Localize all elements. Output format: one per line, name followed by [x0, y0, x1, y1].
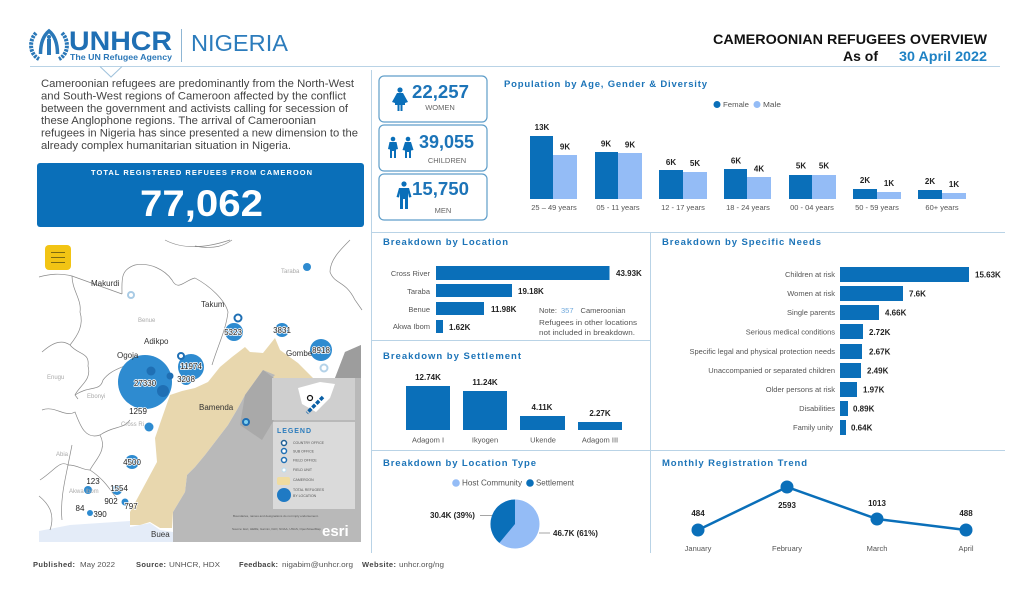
note: Refugees in other locations [539, 318, 637, 327]
bar chart: 25 – 49 years [531, 203, 577, 212]
bar chart: Family unity [793, 423, 833, 432]
bar chart: 1.97K [863, 386, 885, 394]
line chart: February [772, 544, 802, 553]
panel: children count [379, 125, 487, 171]
panel: men count: 15,750 [412, 179, 469, 199]
map: grey neighbouring region [173, 345, 361, 542]
country name: NIGERIA [191, 30, 289, 56]
bar chart: 2K [925, 177, 935, 186]
panel: total registered refugees [37, 163, 364, 227]
map: bubble values: 8918 [312, 346, 330, 355]
intro text block: already complex humanitarian situation in Nigeria. [41, 140, 291, 152]
bar chart: Adagom III [582, 436, 618, 444]
map: refugee bubbles [84, 263, 332, 516]
panel: population by age and gender [504, 79, 966, 212]
map legend: FIELD UNIT [293, 468, 313, 472]
heading: Breakdown by Settlement [383, 351, 522, 362]
bar chart: 1.62K [449, 323, 471, 332]
bar chart: Akwa Ibom [393, 322, 430, 331]
bar chart: 2K [860, 176, 870, 185]
bar chart: 2.67K [869, 348, 891, 356]
map: bubble values: 123 [86, 477, 100, 486]
footer: Published: [33, 560, 75, 569]
heading: Population by Age, Gender & Diversity [504, 79, 708, 90]
heading: Breakdown by Location Type [383, 458, 536, 469]
line chart: March [867, 544, 887, 553]
map: place labels: Cross Ri [121, 422, 144, 428]
bar chart: 5K [796, 162, 806, 170]
heading: Breakdown by Location [383, 237, 508, 248]
map: bubble values: 4500 [123, 458, 141, 467]
bar chart: Ukende [530, 436, 556, 444]
bar chart: Benue [408, 305, 430, 314]
pie chart: 30.4K (39%) [430, 511, 475, 520]
title: 30 April 2022 [899, 48, 987, 64]
panel: men count [379, 174, 487, 220]
bar chart: Single parents [787, 308, 835, 317]
line chart: 484 [691, 509, 705, 518]
bar chart: 50 - 59 years [855, 203, 899, 212]
intro text block: these Anglophone regions. The arrival of Cameroonian [41, 115, 316, 127]
panel: women count: 22,257 [412, 82, 469, 102]
panel: men count: MEN [435, 206, 451, 215]
bar chart [406, 373, 622, 444]
bar chart: 60+ years [925, 203, 959, 212]
map legend: FIELD OFFICE [293, 458, 317, 462]
bar chart: 13K [535, 123, 550, 132]
map: place labels: Enugu [47, 375, 64, 381]
intro text block [41, 78, 358, 152]
panel: women count: WOMEN [425, 103, 455, 112]
panel: children count: 39,055 [419, 132, 474, 152]
footer: Website: [362, 560, 396, 569]
map legend: SUB OFFICE [293, 450, 315, 454]
map: Cameroon tan region [130, 338, 313, 528]
icon: UNHCR emblem [31, 31, 67, 59]
footer [33, 560, 444, 569]
map: place labels: Ebonyi [87, 394, 105, 400]
map legend: LEGEND [277, 428, 311, 435]
map credits: Source: Esri, HERE, Garmin, FAO, NOAA, USGS, OpenStreetMap [232, 527, 321, 531]
line chart [685, 480, 974, 553]
legend: Settlement [536, 478, 575, 488]
total label: TOTAL REGISTERED REFUEES FROM CAMEROON [91, 168, 312, 177]
line chart: 1013 [868, 499, 886, 508]
heading: Breakdown by Specific Needs [662, 237, 821, 248]
panel: monthly registration trend [662, 458, 974, 553]
logo tagline: The UN Refugee Agency [70, 52, 172, 62]
line chart: April [958, 544, 974, 553]
panel: breakdown by location [383, 237, 642, 337]
map: bubble values: 84 [76, 504, 85, 513]
map credits: esri [322, 523, 349, 540]
bar chart: 43.93K [616, 269, 642, 278]
bar chart: Children at risk [785, 270, 835, 279]
map: bubble values: 902 [104, 497, 118, 506]
bar chart: 18 - 24 years [726, 203, 770, 212]
bar chart: 19.18K [518, 287, 544, 296]
bar chart: 0.89K [853, 404, 875, 414]
pie chart [430, 500, 598, 548]
panel: breakdown by settlement [383, 351, 622, 444]
bar chart: Cross River [391, 269, 431, 278]
bar chart: Adagom I [412, 436, 444, 444]
bar chart: 1K [884, 179, 894, 188]
bar chart: 12.74K [415, 373, 441, 382]
line chart: 2593 [778, 501, 796, 510]
map: bubble values: 1259 [129, 407, 147, 416]
line chart: 488 [959, 509, 973, 518]
bar chart: 2.49K [867, 366, 889, 376]
panel: children count: CHILDREN [428, 156, 466, 165]
bar chart: Taraba [407, 287, 431, 296]
button: yellow map menu [45, 245, 71, 270]
bar chart: 9K [625, 140, 635, 150]
bar chart: 2.27K [589, 409, 611, 418]
legend: Male [763, 100, 781, 109]
bar chart: 05 - 11 years [596, 203, 640, 212]
bar chart [689, 267, 1001, 435]
bar chart: 00 - 04 years [790, 203, 834, 212]
map: place labels: Ogoja [117, 351, 139, 360]
panel: women count [379, 76, 487, 122]
map: place labels: Benue [138, 318, 156, 324]
bar chart: 9K [560, 142, 570, 152]
panel: map [39, 239, 362, 542]
title: As of [843, 48, 878, 64]
map: place labels: Bamenda [199, 403, 234, 412]
heading: Monthly Registration Trend [662, 458, 807, 469]
map: place labels: Buea [151, 530, 170, 539]
bar chart: Ikyogen [472, 436, 498, 444]
icon: woman [392, 87, 408, 111]
footer: UNHCR, HDX [169, 560, 220, 569]
note: Note: 357 Cameroonian [539, 306, 626, 315]
map: place labels [47, 269, 313, 539]
footer: unhcr.org/ng [399, 560, 444, 569]
map: place labels: Gombe [286, 349, 313, 358]
bar chart: 4K [754, 164, 764, 174]
map legend: BY LOCATION [293, 494, 317, 498]
map: bubble values: 5323 [224, 328, 242, 337]
footer: Feedback: [239, 560, 278, 569]
title [713, 32, 987, 64]
note [539, 306, 637, 337]
map: place labels: Takum [201, 300, 225, 309]
map: bubble values: 797 [124, 502, 138, 511]
icon: man [396, 181, 412, 209]
map: place labels: Makurdi [91, 279, 120, 288]
bar chart: 12 - 17 years [661, 203, 705, 212]
map legend [273, 422, 355, 509]
title: CAMEROONIAN REFUGEES OVERVIEW [713, 32, 987, 47]
map: sea [39, 521, 173, 542]
map: bubble values: 11974 [180, 362, 202, 371]
pie chart: 46.7K (61%) [553, 529, 598, 538]
map: bubble values: 3208 [177, 375, 195, 384]
map: place labels: Akwa Ibom [69, 489, 99, 495]
bar chart: 11.24K [472, 378, 498, 387]
footer: Source: [136, 560, 166, 569]
intro text block: between the government and activists calling for secession of [41, 103, 349, 115]
intro text block: Cameroonian refugees are predominantly from the North-West [41, 78, 354, 90]
bar chart: 7.6K [909, 290, 926, 298]
bar chart: Unaccompanied or separated children [708, 366, 835, 375]
map: place labels: Adikpo [144, 337, 169, 346]
bar chart: Disabilities [799, 404, 835, 413]
bar chart: 1K [949, 180, 959, 189]
map inset: Nigeria locator [298, 382, 335, 413]
map: bubble values: 1554 [110, 484, 128, 493]
map: place labels: Taraba [281, 269, 300, 275]
bar chart: 4.66K [885, 308, 907, 318]
intro text block: and South-West regions of Cameroon affected by the conflict [41, 90, 346, 102]
icon: children [388, 137, 414, 158]
map credits [232, 514, 349, 540]
line chart: January [685, 544, 712, 553]
bar chart: Serious medical conditions [746, 328, 835, 336]
bar chart [391, 266, 642, 333]
bar chart: Older persons at risk [766, 385, 835, 394]
map legend: COUNTRY OFFICE [293, 441, 325, 445]
bar chart: 4.11K [532, 403, 553, 412]
legend: Female [723, 100, 749, 109]
map credits: Boundaries, names and designations do not imply endorsement. [233, 514, 319, 518]
map legend: TOTAL REFUGEES [293, 488, 325, 492]
bar chart: Specific legal and physical protection needs [689, 347, 835, 356]
map: bubble values [76, 326, 330, 519]
map: bubble values: 3831 [273, 326, 291, 335]
bar chart: 6K [666, 158, 676, 167]
note: not included in breakdown. [539, 328, 635, 337]
map: state borders [39, 240, 362, 530]
panel: breakdown by specific needs [662, 237, 1001, 435]
bar chart: 2.72K [869, 328, 891, 337]
bar chart: 5K [819, 162, 829, 170]
map: place labels: Abia [56, 452, 69, 458]
panel: breakdown by location type [383, 458, 598, 548]
bar chart: 15.63K [975, 270, 1001, 280]
intro text block: refugees in Nigeria has since presented a new dimension to the [41, 128, 358, 140]
legend [714, 100, 781, 109]
legend [452, 478, 575, 488]
logo wordmark: UNHCR [69, 26, 172, 56]
footer: May 2022 [80, 560, 115, 569]
total number: 77,062 [140, 183, 263, 224]
footer: nigabim@unhcr.org [282, 560, 353, 569]
bar chart: 0.64K [851, 424, 873, 432]
map: bubble values: 390 [93, 510, 107, 519]
map legend: CAMEROON [293, 478, 314, 482]
map: bubble values: 27330 [134, 379, 157, 388]
logo: UNHCR [31, 26, 289, 62]
bar chart: Women at risk [787, 289, 835, 298]
bar chart: 9K [601, 140, 611, 148]
legend: Host Community [462, 478, 522, 488]
bar chart: 5K [690, 159, 700, 168]
bar chart: 6K [731, 156, 741, 166]
bar chart [530, 123, 966, 212]
bar chart: 11.98K [491, 305, 517, 314]
